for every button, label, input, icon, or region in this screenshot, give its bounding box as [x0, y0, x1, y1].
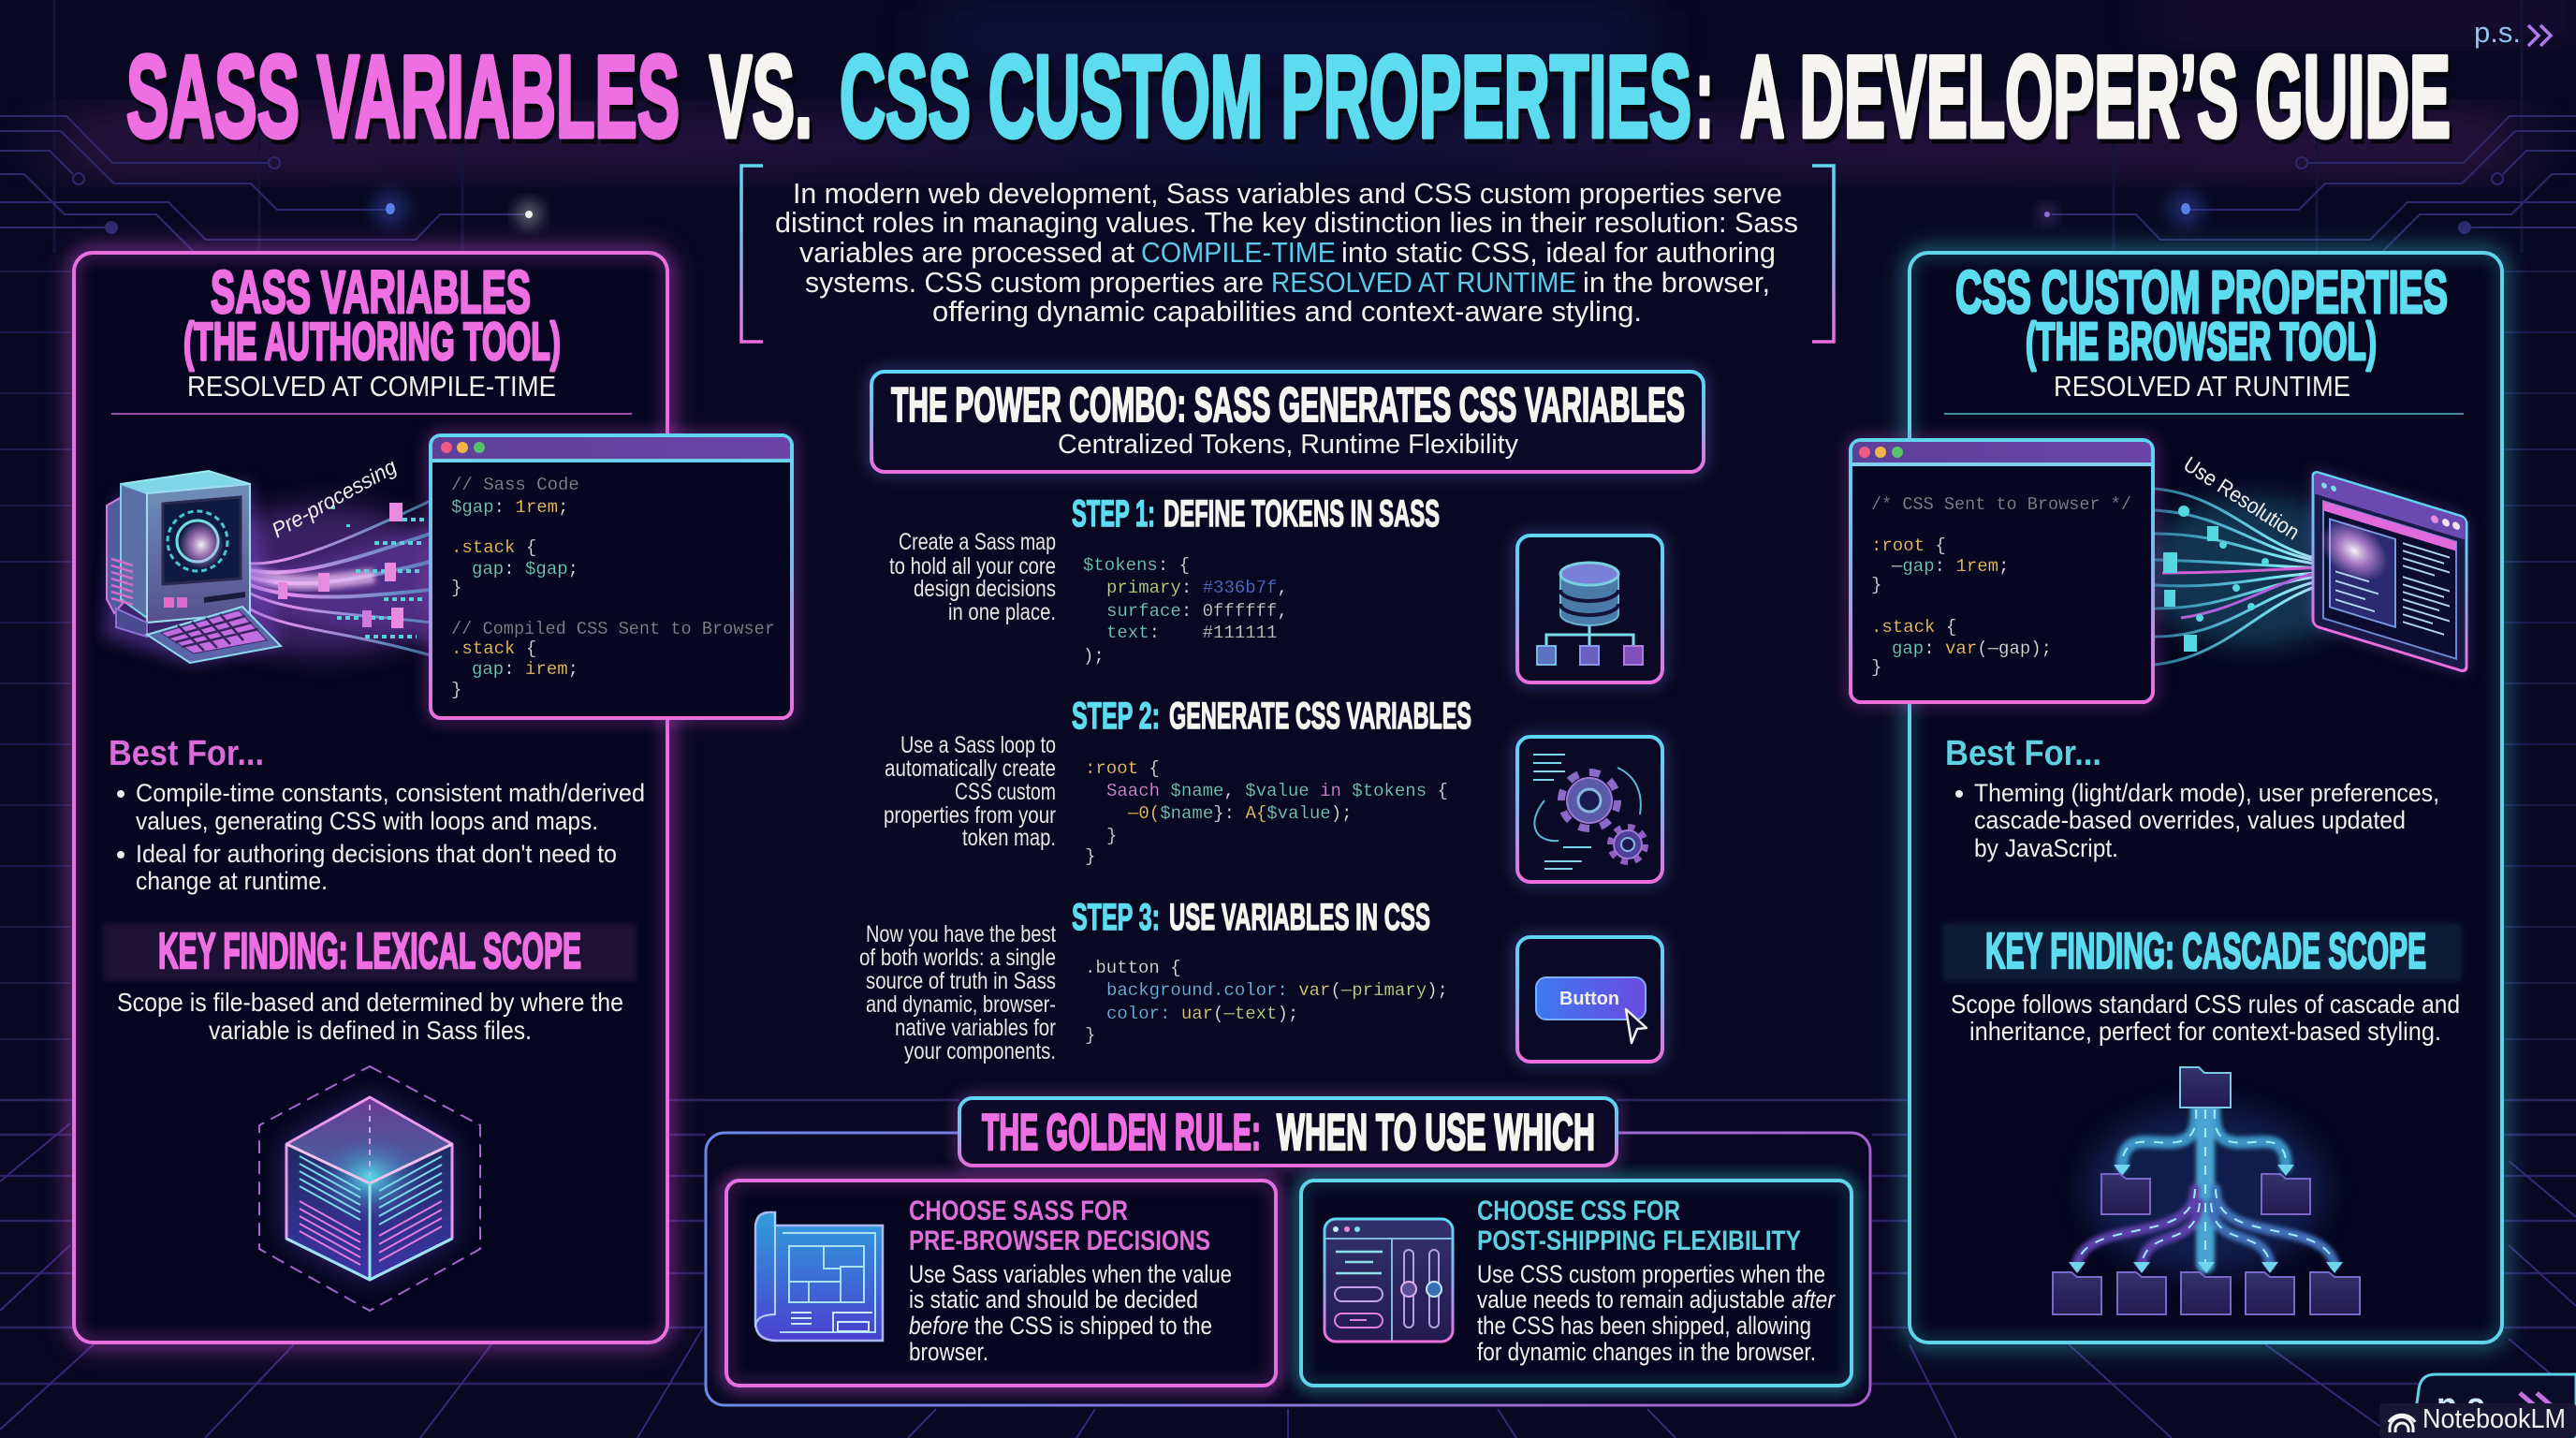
- icon: button with cursor: [1517, 937, 1662, 1062]
- panel heading: CSS: RESOLVED AT RUNTIME: [2054, 370, 2350, 403]
- key finding: cascade scope: [1942, 923, 2462, 1046]
- step 2 description: automatically create: [885, 756, 1056, 782]
- step 3 description: and dynamic, browser-: [866, 991, 1056, 1018]
- title: CSS CUSTOM PROPERTIES: [840, 33, 1691, 162]
- panel heading: Sass: SASS VARIABLES: [211, 258, 531, 326]
- p.s. badge bottom right: p.s.: [2437, 1384, 2495, 1428]
- icon: scoped cube: [259, 1066, 480, 1311]
- key finding: lexical scope: variable is defined in Sass files.: [209, 1016, 532, 1045]
- step 2 code: Saach $name, $value in $tokens {: [1106, 781, 1448, 801]
- p.s. logo top right: [2474, 16, 2551, 49]
- intro text with brackets: variables are processed at: [799, 236, 1134, 269]
- best for: CSS: Best For...: [1945, 734, 2101, 773]
- card text: Sass: browser.: [909, 1338, 988, 1366]
- step 3 code: [1085, 958, 1448, 1046]
- card text: CSS: after: [1792, 1285, 1836, 1313]
- step 1 description: [889, 529, 1056, 625]
- key finding: lexical scope: Scope is file-based and determined by where the: [117, 988, 623, 1017]
- card text: CSS: [1477, 1196, 1836, 1366]
- icon: retro computer: [103, 471, 281, 665]
- code window: CSS: /* CSS Sent to Browser */: [1871, 494, 2131, 515]
- step 1 description: Create a Sass map: [899, 529, 1056, 555]
- card text: Sass: the CSS is shipped to the: [974, 1312, 1212, 1340]
- code window: Sass: // Sass Code: [451, 475, 579, 495]
- card text: Sass: is static and should be decided: [909, 1285, 1198, 1313]
- step 1: [889, 493, 1662, 682]
- step 1 code: $tokens: {: [1083, 555, 1190, 576]
- step 2 description: Use a Sass loop to: [900, 732, 1056, 758]
- step 2 description: CSS custom: [955, 779, 1056, 805]
- code window: Sass: gap: irem;: [472, 659, 578, 680]
- card text: Sass: CHOOSE SASS FOR: [909, 1196, 1128, 1226]
- icon: database tree: [1517, 536, 1662, 682]
- step 1 description: design decisions: [914, 576, 1056, 602]
- step 1 heading: [1072, 493, 1440, 535]
- step 2 heading: GENERATE CSS VARIABLES: [1169, 696, 1471, 737]
- power combo header: THE POWER COMBO: SASS GENERATES CSS VARIABLES: [891, 378, 1685, 433]
- title: SASS VARIABLES: [126, 33, 680, 162]
- code window: CSS: gap: var(—gap);: [1892, 638, 2052, 659]
- key finding: cascade scope: Scope follows standard CSS rules of cascade and: [1951, 990, 2460, 1019]
- intro text with brackets: RESOLVED AT RUNTIME: [1271, 266, 1576, 299]
- step 3 description: your components.: [904, 1038, 1056, 1064]
- code window: CSS: }: [1871, 575, 1881, 595]
- step 1 code: primary: #336b7f,: [1106, 578, 1288, 598]
- panel heading: Sass: (THE AUTHORING TOOL): [183, 312, 561, 372]
- power combo header: Centralized Tokens, Runtime Flexibility: [1058, 430, 1518, 460]
- card text: CSS: value needs to remain adjustable: [1477, 1285, 1785, 1313]
- p.s. badge bottom right: [2412, 1374, 2576, 1438]
- icon: cascading folders: [2053, 1067, 2360, 1314]
- card: choose CSS: [1301, 1181, 1852, 1386]
- key finding: lexical scope: [103, 923, 637, 1045]
- intro text with brackets: offering dynamic capabilities and context-aware styling.: [932, 295, 1642, 328]
- best for: Sass: Ideal for authoring decisions that don't need to: [136, 840, 617, 868]
- step 2 heading: STEP 2:: [1072, 696, 1160, 737]
- step 1 code: surface: 0ffffff,: [1106, 601, 1288, 622]
- intro text with brackets: [741, 166, 1834, 342]
- step 2 code: —0($name}: A{$value);: [1127, 803, 1352, 824]
- key finding: cascade scope: inheritance, perfect for context-based styling.: [1969, 1017, 2441, 1046]
- card text: Sass: before: [909, 1312, 969, 1340]
- p.s. logo top right: p.s.: [2474, 16, 2521, 49]
- intro text with brackets: systems. CSS custom properties are: [805, 266, 1264, 299]
- step 3 description: source of truth in Sass: [866, 968, 1056, 994]
- icon: browser window: [2313, 471, 2466, 672]
- code window: Sass: .stack {: [451, 638, 536, 659]
- step 3 code: }: [1085, 1025, 1095, 1046]
- step 2 code: [1085, 758, 1448, 867]
- step 3 description: of both worlds: a single: [859, 945, 1056, 971]
- stream: use resolution: [2144, 489, 2368, 665]
- step 2 description: properties from your: [884, 802, 1056, 829]
- step 1 description: to hold all your core: [889, 553, 1056, 580]
- code window: CSS: }: [1871, 657, 1881, 678]
- title: :: [1695, 33, 1714, 162]
- icon: button with cursor: Button: [1559, 989, 1619, 1009]
- step 2 code: }: [1106, 826, 1117, 846]
- key finding: lexical scope: KEY FINDING: LEXICAL SCOPE: [158, 923, 581, 979]
- code window: CSS: [1851, 440, 2153, 702]
- best for: Sass: Best For...: [109, 734, 264, 773]
- step 3: [859, 897, 1662, 1064]
- code window: Sass: $gap: 1rem;: [451, 497, 568, 518]
- step 3 heading: STEP 3:: [1072, 897, 1160, 938]
- step 3 description: Now you have the best: [866, 921, 1056, 947]
- card text: CSS: the CSS has been shipped, allowing: [1477, 1312, 1811, 1340]
- best for: Sass: Compile-time constants, consistent math/derived: [136, 779, 645, 807]
- best for: CSS: by JavaScript.: [1974, 834, 2118, 862]
- best for: Sass: [109, 734, 645, 895]
- step 1 description: in one place.: [948, 599, 1056, 625]
- code window: CSS: :root {: [1871, 536, 1946, 556]
- step 1 code: text: #111111: [1106, 623, 1277, 643]
- NotebookLM watermark: NotebookLM: [2422, 1404, 2566, 1434]
- step 2: [884, 696, 1662, 882]
- step 1 code: );: [1083, 646, 1105, 667]
- golden rule header: THE GOLDEN RULE:: [982, 1103, 1261, 1161]
- step 3 heading: [1072, 897, 1430, 938]
- intro text with brackets: distinct roles in managing values. The key distinction lies in their resolution: Sass: [775, 206, 1798, 239]
- panel heading: Sass: RESOLVED AT COMPILE-TIME: [187, 370, 556, 403]
- card text: CSS: Use CSS custom properties when the: [1477, 1260, 1825, 1288]
- NotebookLM watermark: [2379, 1403, 2576, 1438]
- card text: Sass: [909, 1196, 1232, 1366]
- best for: CSS: [1945, 734, 2439, 862]
- code window: Sass: }: [451, 578, 461, 598]
- step 1 heading: STEP 1:: [1072, 493, 1155, 535]
- card text: CSS: for dynamic changes in the browser.: [1477, 1338, 1816, 1366]
- icon: blueprint: [755, 1212, 883, 1341]
- step 2 code: }: [1085, 846, 1095, 867]
- step 2 description: [884, 732, 1056, 851]
- intro text with brackets: COMPILE-TIME: [1141, 236, 1336, 269]
- step 2 code: :root {: [1085, 758, 1160, 779]
- code window: Sass: gap: $gap;: [472, 559, 578, 580]
- panel: CSS custom properties: [1851, 253, 2502, 1343]
- step 3 heading: USE VARIABLES IN CSS: [1169, 897, 1430, 938]
- step 3 code: background.color: var(—primary);: [1106, 980, 1448, 1001]
- golden rule panel: [706, 1098, 1870, 1405]
- icon: settings sliders: [1325, 1219, 1453, 1342]
- panel heading: CSS: [1944, 258, 2464, 415]
- best for: CSS: cascade-based overrides, values updated: [1974, 806, 2406, 834]
- golden rule header: WHEN TO USE WHICH: [1277, 1103, 1595, 1161]
- card text: CSS: POST-SHIPPING FLEXIBILITY: [1477, 1225, 1801, 1256]
- card: choose Sass: [726, 1181, 1276, 1386]
- best for: Sass: change at runtime.: [136, 867, 328, 895]
- step 3 code: color: uar(—text);: [1106, 1004, 1298, 1024]
- code window: Sass: [431, 435, 792, 718]
- card text: CSS: CHOOSE CSS FOR: [1477, 1196, 1680, 1226]
- intro text with brackets: In modern web development, Sass variables and CSS custom properties serve: [793, 177, 1782, 210]
- power combo header: [871, 372, 1704, 472]
- title: VS.: [710, 33, 812, 162]
- title: [126, 33, 2451, 162]
- step 2 heading: [1072, 696, 1471, 737]
- step 3 description: native variables for: [895, 1015, 1056, 1041]
- step 1 code: [1083, 555, 1288, 667]
- golden rule header: [959, 1098, 1617, 1166]
- panel: Sass variables: [74, 253, 792, 1343]
- best for: CSS: Theming (light/dark mode), user preferences,: [1974, 779, 2439, 807]
- code window: Sass: // Compiled CSS Sent to Browser: [451, 619, 775, 639]
- code window: Sass: .stack {: [451, 537, 536, 558]
- code window: CSS: —gap: 1rem;: [1891, 556, 2009, 577]
- intro text with brackets: in the browser,: [1583, 266, 1770, 299]
- step 2 description: token map.: [962, 825, 1056, 851]
- stream: pre-processing: [192, 501, 454, 655]
- icon: gears: [1517, 737, 1662, 882]
- step 3 code: .button {: [1085, 958, 1181, 978]
- panel heading: Sass: [111, 258, 632, 415]
- step 3 description: [859, 921, 1056, 1064]
- code window: Sass: }: [451, 680, 461, 700]
- step 1 heading: DEFINE TOKENS IN SASS: [1164, 493, 1440, 535]
- code window: CSS: .stack {: [1871, 617, 1956, 638]
- intro text with brackets: into static CSS, ideal for authoring: [1341, 236, 1776, 269]
- best for: Sass: values, generating CSS with loops and maps.: [136, 807, 598, 835]
- card text: Sass: Use Sass variables when the value: [909, 1260, 1232, 1288]
- label: pre-processing: Pre-processing: [268, 454, 401, 542]
- card text: Sass: PRE-BROWSER DECISIONS: [909, 1225, 1210, 1256]
- label: use resolution: Use Resolution: [2179, 451, 2305, 545]
